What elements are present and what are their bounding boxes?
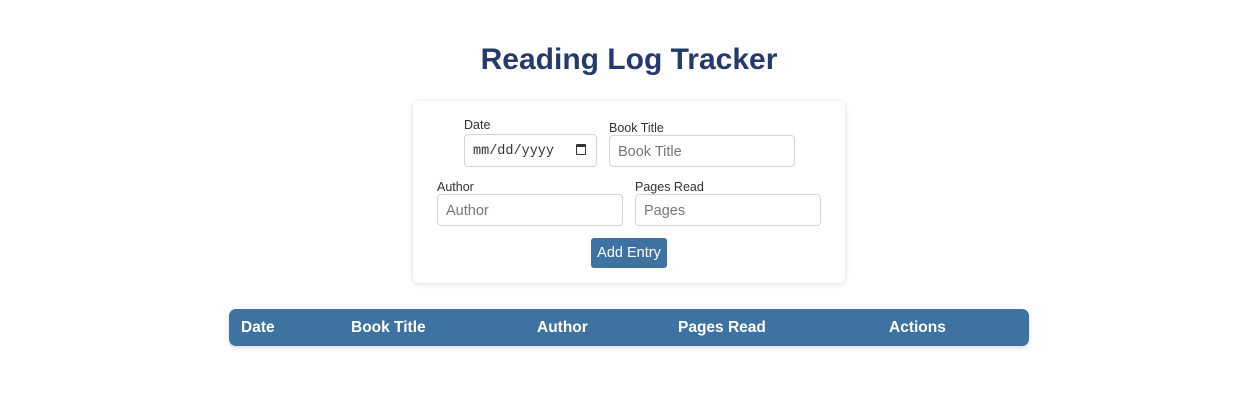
label: pages read: Pages Read: [635, 180, 704, 194]
input: pages: [635, 194, 821, 226]
label: book title: Book Title: [609, 121, 664, 135]
header: pages read: Pages Read: [678, 319, 766, 336]
input: author: [437, 194, 623, 226]
input: pages: Pages: [644, 202, 685, 218]
header: actions: Actions: [889, 319, 946, 336]
header: author: Author: [537, 319, 588, 336]
label: author: Author: [437, 180, 474, 194]
title: Reading Log Tracker: [481, 43, 777, 76]
label: date: Date: [464, 118, 490, 132]
input: book title: Book Title: [618, 144, 682, 160]
input: author: Author: [446, 202, 489, 218]
input: date: mm/dd/yyyy: [473, 144, 554, 158]
button: add entry: [591, 238, 667, 268]
input: date: [464, 134, 597, 167]
input: book title: [609, 135, 795, 167]
header: book title: Book Title: [351, 319, 426, 336]
table header: [229, 309, 1029, 346]
button: add entry: Add Entry: [597, 245, 661, 261]
panel: entry form: [413, 101, 845, 283]
header: date: Date: [241, 319, 275, 336]
